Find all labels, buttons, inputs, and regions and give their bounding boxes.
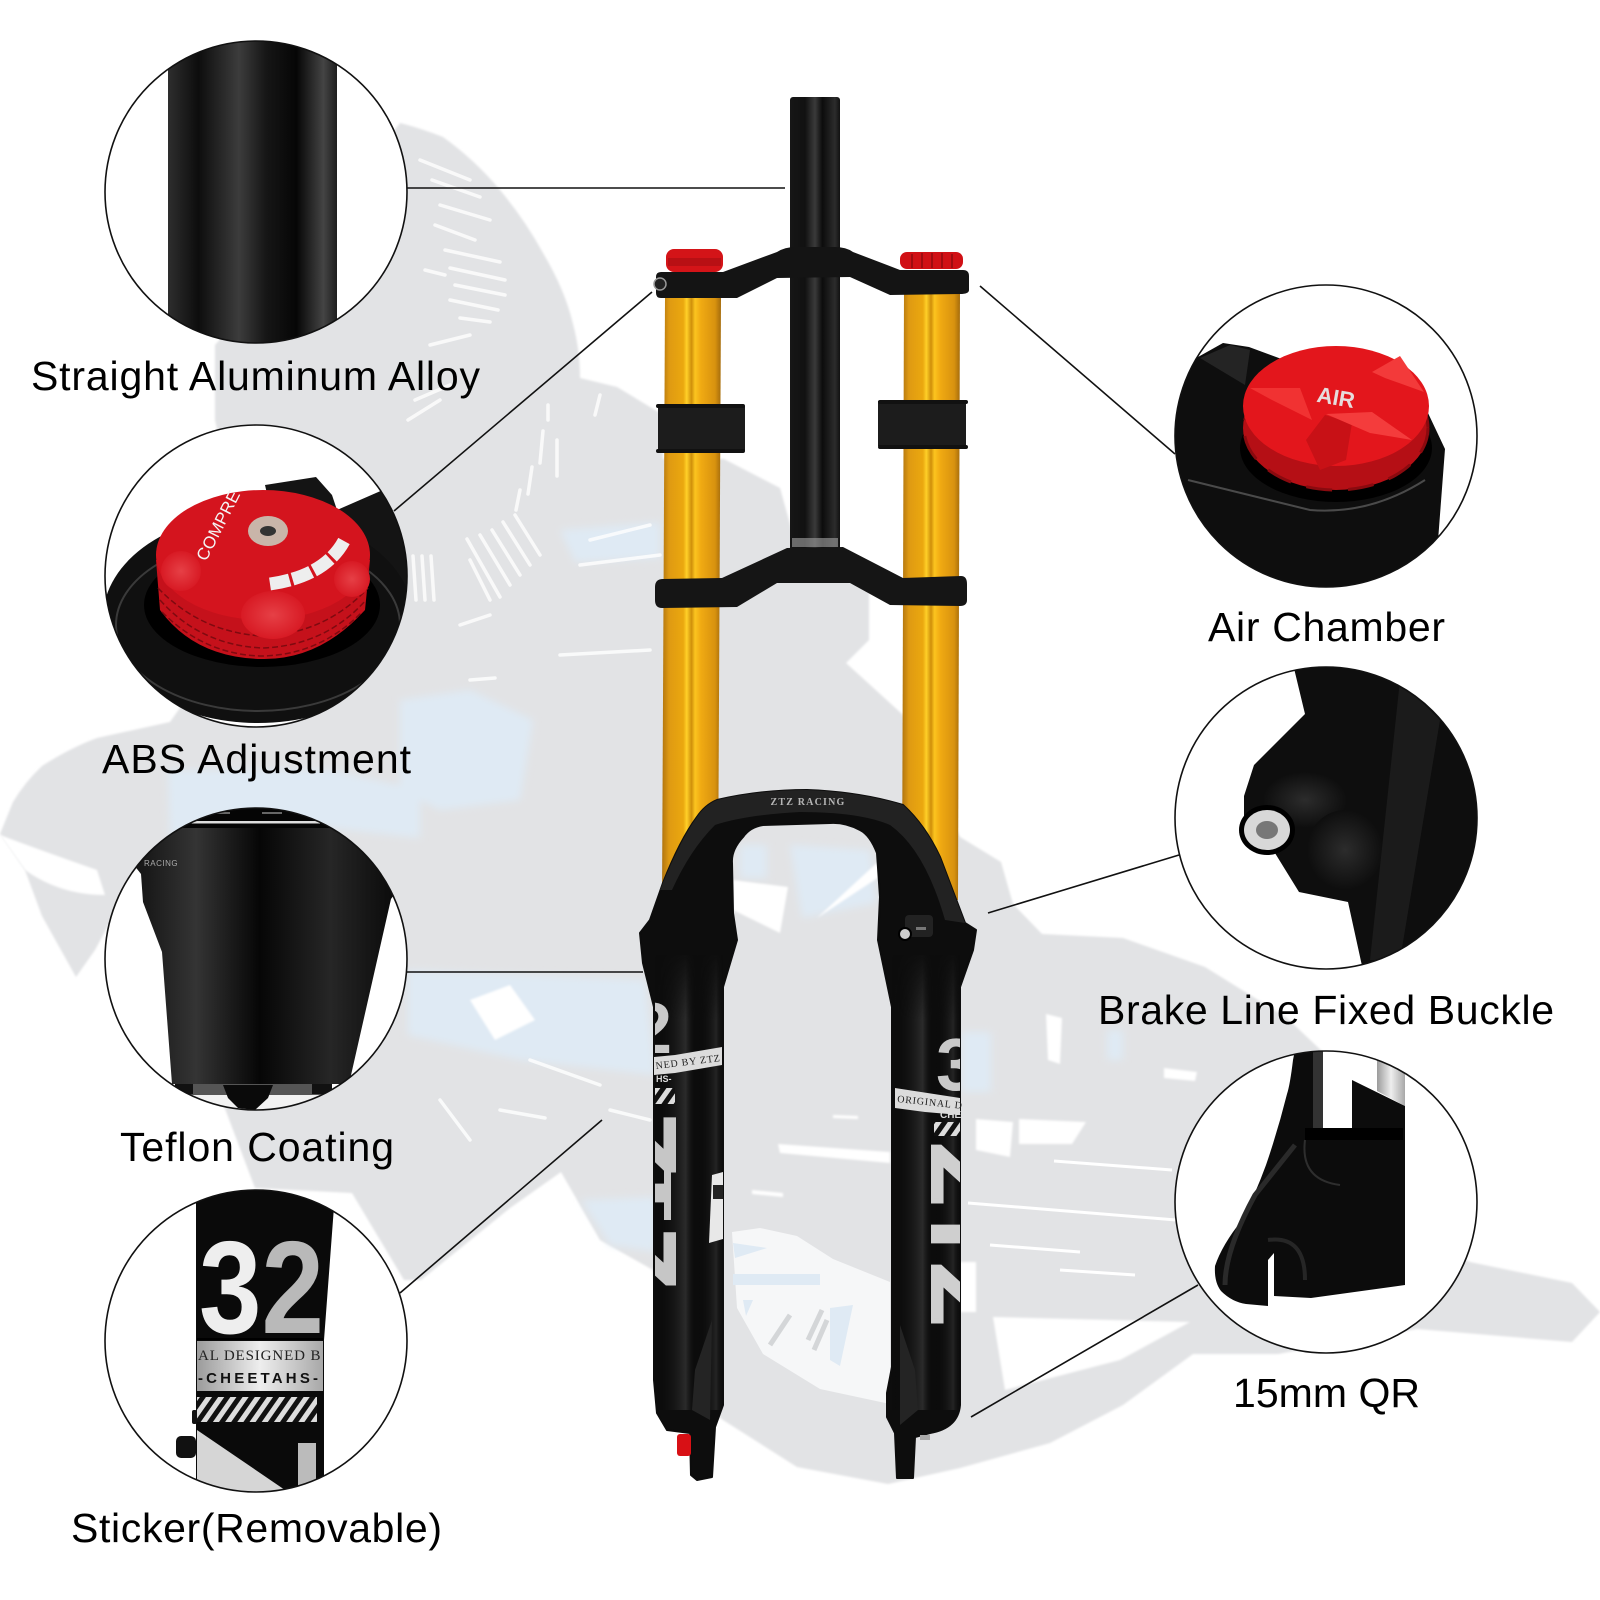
right leg shading bbox=[910, 970, 956, 1410]
right gold stanchion bbox=[902, 290, 960, 900]
left leg hatch bbox=[655, 1088, 675, 1104]
leader line: sticker bbox=[400, 1120, 602, 1293]
inset: decal close-up: -CHEETAHS- bbox=[198, 1370, 318, 1387]
right red cap bbox=[900, 252, 963, 269]
right leg che text: CHE bbox=[940, 1110, 961, 1121]
inset: red air cap bbox=[1176, 343, 1445, 586]
panel: brake line fixed buckle bbox=[1098, 660, 1554, 1033]
inset: decal close-up: AL DESIGNED B bbox=[198, 1348, 322, 1364]
left leg ZTZ decal: Z bbox=[599, 1228, 693, 1288]
left gold stanchion bbox=[662, 298, 721, 900]
panel: 15mm QR bbox=[1175, 1050, 1477, 1416]
inset: black lower crown cone: RACING bbox=[144, 859, 178, 868]
steerer tube bbox=[790, 97, 840, 552]
lower crown bbox=[655, 547, 967, 608]
left leg ZTZ decal bbox=[655, 1117, 676, 1286]
right travel band bbox=[878, 400, 968, 449]
label: air chamber: Air Chamber bbox=[1208, 604, 1445, 650]
right leg 3 decal: 3 bbox=[936, 1023, 977, 1106]
label: 15mm QR: 15mm QR bbox=[1233, 1370, 1420, 1416]
right leg band text: ORIGINAL D bbox=[897, 1094, 963, 1112]
inset: decal close-up bbox=[176, 1180, 336, 1500]
panel: sticker removable bbox=[71, 1180, 442, 1551]
label: ABS adjustment: ABS Adjustment bbox=[102, 736, 412, 782]
leader line: air chamber bbox=[980, 286, 1175, 454]
arch top face bbox=[660, 790, 965, 923]
inset: black lower crown cone bbox=[136, 808, 393, 1110]
left dropout highlight bbox=[692, 1320, 712, 1420]
warning label bbox=[709, 1172, 723, 1243]
inset: matte steerer tube bbox=[168, 30, 337, 360]
right leg ZTZ decal: ZTZ bbox=[914, 1144, 1008, 1324]
left leg ZTZ decal: T bbox=[599, 1163, 693, 1223]
steerer weld bbox=[792, 538, 838, 547]
inset: red compression knob bbox=[103, 477, 413, 723]
inset: buckle and bolt bbox=[1239, 668, 1476, 964]
leader line: teflon coating bbox=[407, 971, 643, 973]
upper crown bbox=[656, 247, 969, 298]
label: sticker removable: Sticker(Removable) bbox=[71, 1505, 442, 1551]
leader line: ABS adjustment bbox=[394, 292, 652, 511]
helmet stripes bbox=[408, 160, 660, 1140]
leader line: 15mm QR bbox=[971, 1285, 1198, 1417]
left leg band bbox=[654, 1047, 722, 1075]
upper crown bolt bbox=[654, 278, 666, 290]
red rebound knob bbox=[677, 1434, 691, 1456]
left leg ZTZ decal: Z bbox=[599, 1113, 693, 1175]
inset: red compression knob: COMPRE bbox=[193, 487, 244, 564]
leader line: brake line buckle bbox=[988, 855, 1179, 913]
road and frame streaks bbox=[968, 1161, 1176, 1275]
left leg chs text: HS- bbox=[656, 1074, 672, 1084]
left red cap bbox=[666, 249, 723, 272]
right leg band bbox=[895, 1088, 960, 1115]
label: brake line fixed buckle: Brake Line Fixed Buckle bbox=[1098, 987, 1554, 1033]
left leg 32 decal: 2 bbox=[632, 989, 672, 1069]
right leg hatch bbox=[934, 1122, 960, 1136]
panel: teflon coating bbox=[100, 790, 420, 1170]
right dropout highlight bbox=[900, 1325, 918, 1425]
fork bbox=[639, 97, 977, 1481]
panel: ABS adjustment bbox=[102, 425, 413, 782]
left leg shading bbox=[674, 970, 719, 1410]
left leg band text: NED BY ZTZ bbox=[655, 1053, 721, 1072]
panel: straight aluminum alloy bbox=[31, 30, 480, 399]
arch brand text: ZTZ RACING bbox=[770, 797, 846, 808]
panel: air chamber bbox=[1160, 285, 1477, 650]
brake line buckle bbox=[899, 915, 933, 940]
label: teflon coating: Teflon Coating bbox=[120, 1124, 394, 1170]
leader line: steerer bbox=[407, 187, 785, 189]
wheel bbox=[732, 1228, 890, 1404]
label: straight aluminum alloy: Straight Aluminum Alloy bbox=[31, 353, 480, 399]
silver axle end bbox=[920, 1435, 930, 1440]
lower arch and legs bbox=[640, 790, 976, 1480]
inset: quick release dropout bbox=[1215, 1050, 1405, 1306]
left travel band bbox=[656, 404, 745, 453]
inset: red air cap: AIR bbox=[1315, 382, 1357, 413]
inset: decal close-up: 32 bbox=[199, 1214, 324, 1361]
